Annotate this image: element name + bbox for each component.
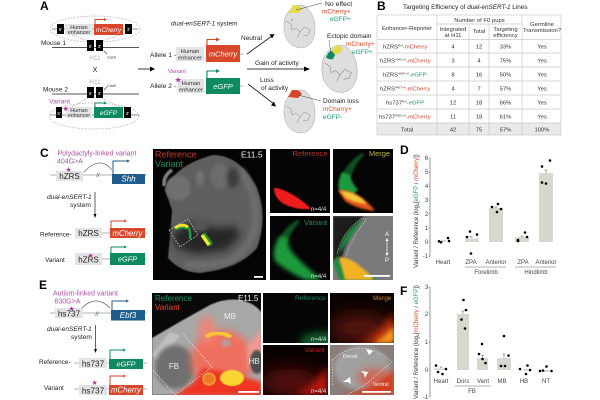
variant construct: ★	[88, 252, 94, 260]
micrograph: reference channel	[270, 149, 330, 213]
y axis: Variant / Reference (log	[414, 205, 420, 268]
table rows: -mCherry	[406, 114, 431, 120]
table header: Total	[473, 29, 485, 35]
allele 2: Variant	[168, 69, 186, 75]
micrograph: variant channel head: n=4/4	[311, 389, 327, 395]
system arrow: dual-enSERT-1	[47, 194, 92, 201]
mouse 2 H11 locus: 5'	[89, 91, 92, 96]
micrograph: merge channel head	[330, 293, 394, 343]
embryo: ectopic domain	[322, 33, 375, 92]
variant label: 404G>A	[57, 158, 83, 166]
mouse 2 construct: enhancer	[68, 113, 90, 119]
reference construct: Reference-	[39, 359, 71, 366]
x labels: Heart	[434, 379, 449, 385]
panel letter C: C	[40, 146, 49, 160]
micrograph: reference channel head: Reference	[295, 295, 326, 302]
table rows: 830G>A	[395, 114, 406, 118]
panel: D limb bar chart	[400, 143, 557, 276]
micrograph: merge channel head: Merge	[373, 295, 392, 302]
table rows: -mCherry	[406, 58, 431, 64]
hZRS locus: hZRS	[59, 172, 80, 181]
image labels: Reference	[155, 150, 197, 160]
image labels: MB	[224, 312, 236, 321]
reference construct	[39, 348, 147, 369]
variant label: Polydactyly-linked variant	[58, 150, 137, 158]
y axis: 2	[425, 312, 429, 318]
micrograph: E11.5 head overlay	[152, 293, 264, 396]
table header: Enhancer-Reporter	[382, 26, 432, 32]
allele 2: enhancer	[179, 88, 203, 94]
embryo: no effect: eGFP+	[330, 16, 351, 23]
allele 2: Human	[182, 81, 200, 87]
x labels: ZPA	[465, 260, 477, 266]
bars	[434, 314, 511, 370]
panel: A dual-enSERT-1 schematic	[40, 0, 375, 133]
table rows: -eGFP	[407, 100, 424, 106]
table header: Targeting	[493, 27, 518, 33]
y axis: 4	[425, 184, 429, 190]
reference construct: Reference-	[40, 232, 72, 238]
system arrow	[47, 192, 96, 218]
x labels: ZPA	[517, 260, 529, 266]
micrograph: variant channel	[270, 216, 330, 280]
table rows: hs737	[386, 100, 402, 106]
table rows: Ref	[402, 100, 407, 104]
neutral arrow: Neutral	[241, 35, 263, 42]
neutral arrow	[241, 34, 274, 54]
bars	[465, 173, 553, 242]
y axis: 2	[425, 212, 429, 218]
embryo: domain loss	[284, 90, 360, 133]
y axis: 3	[425, 198, 429, 204]
table header	[382, 18, 562, 39]
y axis	[414, 154, 430, 268]
panel: E hs737 schematic	[39, 278, 147, 396]
mouse 1 construct: mCherry	[96, 27, 122, 34]
mouse 2 construct: Variant	[49, 98, 70, 106]
table rows: Ref	[398, 44, 403, 48]
system arrow: system	[70, 202, 91, 209]
y axis: Variant / Reference (log	[414, 336, 420, 399]
table rows: 75	[476, 128, 483, 134]
reference construct	[40, 220, 147, 238]
y axis: 0	[425, 368, 429, 374]
x labels: HB	[520, 379, 528, 385]
table rows: 57%	[500, 128, 512, 134]
table rows: 18	[476, 114, 483, 120]
error bars	[440, 311, 549, 371]
variant label	[57, 150, 137, 166]
mouse 2 H11 locus: Cas9	[107, 84, 116, 88]
reference construct: mCherry	[113, 229, 144, 238]
mouse 2 construct: ★	[62, 105, 69, 113]
x labels: Vent	[477, 379, 489, 385]
loss of activity arrow	[248, 77, 289, 106]
table rows: 404G>A	[398, 72, 409, 76]
mouse 2 construct: Human	[70, 108, 88, 114]
variant label: Autism-linked variant	[53, 290, 118, 298]
micrograph: variant channel: Variant	[304, 218, 328, 227]
table rows	[379, 44, 550, 134]
y axis	[414, 285, 430, 400]
micrograph: reference channel head: n=4/4	[311, 337, 327, 343]
table rows: -mCherry	[406, 86, 430, 92]
x labels: MB	[498, 379, 506, 385]
hZRS locus: //	[96, 173, 100, 179]
micrograph: merge with outline: A	[385, 232, 389, 238]
allele 1	[150, 38, 243, 62]
table header: Number of F0 pups	[454, 18, 505, 24]
x labels: Dors	[457, 379, 469, 385]
image labels: Reference	[155, 294, 192, 303]
table header: at H11	[445, 33, 461, 39]
variant construct: eGFP	[118, 254, 137, 264]
mouse 2 H11 locus	[43, 79, 139, 107]
arrow to alleles	[138, 66, 155, 72]
allele 2: ★	[174, 76, 182, 84]
allele 1: mCherry	[209, 50, 238, 58]
scale bar	[254, 276, 263, 278]
x labels: Anterior	[485, 260, 507, 266]
mouse 1 H11 locus: H11	[89, 55, 101, 62]
table rows: 4	[477, 58, 481, 64]
hs737 locus: //	[95, 312, 99, 318]
micrograph: variant channel: n=4/4	[311, 274, 327, 280]
x labels: Forelimb	[474, 270, 498, 276]
embryo: no effect	[284, 1, 352, 48]
loss of activity arrow: of activity	[261, 85, 289, 92]
y axis: [	[414, 201, 420, 203]
panel: C hZRS schematic	[40, 146, 147, 265]
variant construct: mCherry	[111, 386, 142, 394]
variant construct: ★	[92, 379, 98, 387]
x labels	[434, 379, 550, 395]
embryo: no effect: mCherry+	[322, 8, 351, 16]
mouse 1 construct	[50, 16, 140, 42]
table rows: 440T>A	[395, 86, 406, 90]
mouse 2 construct: 3'	[126, 111, 129, 116]
x labels: Heart	[436, 260, 451, 266]
x labels: Hindlimb	[524, 270, 548, 276]
panel letter F: F	[400, 284, 407, 298]
table rows: 33%	[500, 44, 512, 50]
hZRS locus	[50, 160, 147, 184]
hs737 locus: hs737	[58, 310, 81, 318]
table title: Targeting Efficiency of dual-enSERT-1 Lines	[403, 4, 528, 11]
y axis: 1	[425, 340, 429, 346]
embryo: domain loss: Domain loss	[323, 98, 360, 105]
micrograph: variant channel head	[260, 345, 328, 395]
x labels: NT	[542, 379, 550, 385]
y axis: eGFP / mCherry])	[414, 154, 420, 201]
table rows: Yes	[537, 86, 547, 92]
table rows: 4	[451, 44, 455, 50]
panel letter D: D	[400, 143, 409, 157]
reference construct: hs737	[82, 360, 105, 368]
x labels: FB	[468, 389, 476, 395]
table rows: 7	[477, 86, 481, 92]
mouse 1 H11 locus: Mouse 1	[41, 40, 66, 47]
allele 1: enhancer	[178, 56, 202, 62]
table rows: -eGFP	[409, 72, 427, 78]
embryo: domain loss: mCherry+	[323, 106, 352, 113]
micrograph: merge with outline head: Dorsal	[343, 354, 357, 360]
mouse 2 construct	[49, 98, 139, 129]
table rows: 66%	[500, 100, 512, 106]
hs737 locus: Ebf3	[120, 311, 137, 320]
variant construct: hs737	[82, 386, 105, 396]
table rows: 42	[450, 128, 456, 134]
table rows: Yes	[537, 114, 547, 120]
table rows: Yes	[537, 100, 547, 106]
table rows: hZRS	[380, 86, 395, 92]
system title: dual-enSERT-1 system	[171, 20, 238, 28]
y axis: -1	[423, 254, 429, 260]
table rows: 4	[451, 86, 455, 92]
mouse 2 H11 locus: 3'	[98, 91, 101, 96]
table rows: 75%	[500, 58, 512, 64]
embryo: domain loss: eGFP-	[323, 114, 342, 121]
system arrow: dual-enSERT-1	[47, 326, 92, 333]
hZRS locus: Shh	[121, 174, 136, 184]
panel: B targeting efficiency table	[377, 0, 562, 135]
image labels: E11.5	[238, 294, 259, 303]
table rows: 57%	[500, 86, 512, 92]
mouse 1 construct: 5'	[59, 27, 62, 32]
table rows: 12	[476, 44, 482, 50]
y axis: 0	[425, 240, 429, 246]
variant construct	[45, 246, 147, 265]
mouse 1 construct: enhancer	[68, 30, 90, 36]
mouse 1 construct: Human	[70, 25, 88, 31]
micrograph: reference channel head	[263, 293, 328, 343]
micrograph: reference channel: Reference	[292, 149, 328, 158]
embryo: ectopic domain: eGFP+	[352, 49, 373, 56]
embryo: ectopic domain: mCherry+	[346, 41, 375, 48]
y axis: 6	[425, 156, 429, 162]
mouse 1 H11 locus: Cas9	[107, 56, 116, 60]
image labels: HB	[248, 357, 260, 366]
image labels: Variant	[155, 303, 181, 312]
mouse 2 construct: eGFP	[100, 110, 118, 117]
y axis: 2	[416, 203, 420, 205]
table rows: 61%	[500, 114, 512, 120]
table rows: hZRS	[383, 44, 398, 50]
table rows: 100%	[534, 128, 550, 134]
table rows: 404G>A	[395, 58, 406, 62]
allele 2: eGFP	[213, 82, 233, 91]
reference construct: hZRS	[78, 229, 99, 238]
micrograph: merge channel	[333, 149, 393, 213]
y axis: 2	[416, 334, 420, 336]
micrograph: variant channel head: Variant	[304, 347, 325, 354]
table grid	[377, 15, 561, 135]
micrograph: merge with outline head: Ventral	[373, 382, 389, 388]
variant label: 830G>A	[54, 298, 81, 306]
gain of activity arrow: Gain of activity	[255, 60, 300, 67]
mouse 1 construct: 3'	[127, 27, 130, 32]
micrograph: merge with outline head	[330, 345, 394, 395]
table rows: 11	[450, 114, 456, 120]
allele 1: Human	[181, 49, 199, 55]
micrograph: merge with outline: P	[385, 258, 389, 264]
image labels: Variant	[155, 159, 183, 169]
table header: efficiency	[493, 33, 518, 39]
data points	[438, 159, 551, 255]
embryo: ectopic domain: Ectopic domain	[327, 33, 372, 40]
reference construct: eGFP	[116, 360, 136, 368]
table rows: Yes	[537, 72, 547, 78]
scale bar	[238, 391, 259, 393]
table rows: hs737	[379, 114, 395, 120]
table rows: 16	[476, 72, 483, 78]
panel: F head bar chart	[400, 284, 553, 400]
variant construct: hZRS	[78, 256, 99, 264]
micrograph: merge channel: Merge	[369, 149, 390, 158]
x labels: Anterior	[535, 260, 557, 266]
allele 2: Allele 2 -	[150, 83, 176, 90]
variant construct: Variant	[44, 385, 64, 392]
data points	[435, 299, 553, 375]
micrograph: E11.5 embryo whole mount	[153, 149, 266, 280]
mouse 2 construct: 5'	[57, 111, 61, 116]
table rows: Total	[401, 128, 413, 134]
hZRS locus: ★	[66, 166, 72, 174]
table header: Transmission?	[523, 28, 562, 34]
y axis: mCherry / eGFP])	[414, 285, 420, 332]
hs737 locus	[50, 300, 147, 320]
table rows: 8	[451, 72, 455, 78]
y axis: [	[414, 332, 420, 334]
x labels	[436, 260, 557, 276]
error bars	[441, 170, 548, 241]
cross symbol: X	[93, 67, 98, 74]
variant label	[53, 290, 118, 306]
mouse 2 H11 locus: H11	[89, 79, 101, 86]
table rows: Yes	[537, 44, 547, 50]
panel letter E: E	[39, 278, 47, 292]
micrograph: reference channel: n=4/4	[311, 207, 327, 213]
table rows: 18	[476, 100, 483, 106]
table rows: 50%	[500, 72, 512, 78]
allele 2	[150, 69, 243, 94]
system arrow	[47, 325, 97, 353]
hs737 locus: ★	[68, 305, 75, 313]
mouse 1 H11 locus: 3'	[98, 44, 101, 49]
table header: Germline	[530, 22, 555, 28]
image labels: FB	[169, 362, 179, 371]
loss of activity arrow: Loss	[260, 77, 274, 84]
table rows: hZRS	[383, 72, 398, 78]
system arrow: system	[71, 334, 92, 341]
table rows: -mCherry	[403, 44, 427, 50]
y axis: 3	[425, 285, 429, 291]
table rows: Yes	[537, 58, 547, 64]
table header: Integrated	[440, 27, 466, 33]
image labels	[155, 150, 263, 169]
table rows: hZRS	[380, 58, 395, 64]
image labels: E11.5	[241, 150, 263, 160]
image labels	[155, 294, 260, 371]
table rows: 3	[451, 58, 455, 64]
gain of activity arrow	[247, 60, 310, 72]
variant construct: Variant	[45, 257, 65, 264]
table rows: 12	[450, 100, 456, 106]
y axis: 5	[425, 170, 429, 176]
mouse 1 H11 locus	[41, 35, 139, 62]
mouse 2 H11 locus: Mouse 2	[43, 86, 68, 94]
micrograph: merge with outline	[333, 216, 393, 280]
embryo: no effect: No effect	[325, 1, 352, 8]
y axis: 1	[425, 226, 429, 232]
mouse 1 H11 locus: 5'	[89, 44, 92, 49]
variant construct	[44, 374, 147, 396]
allele 1: Allele 1 -	[150, 52, 176, 59]
